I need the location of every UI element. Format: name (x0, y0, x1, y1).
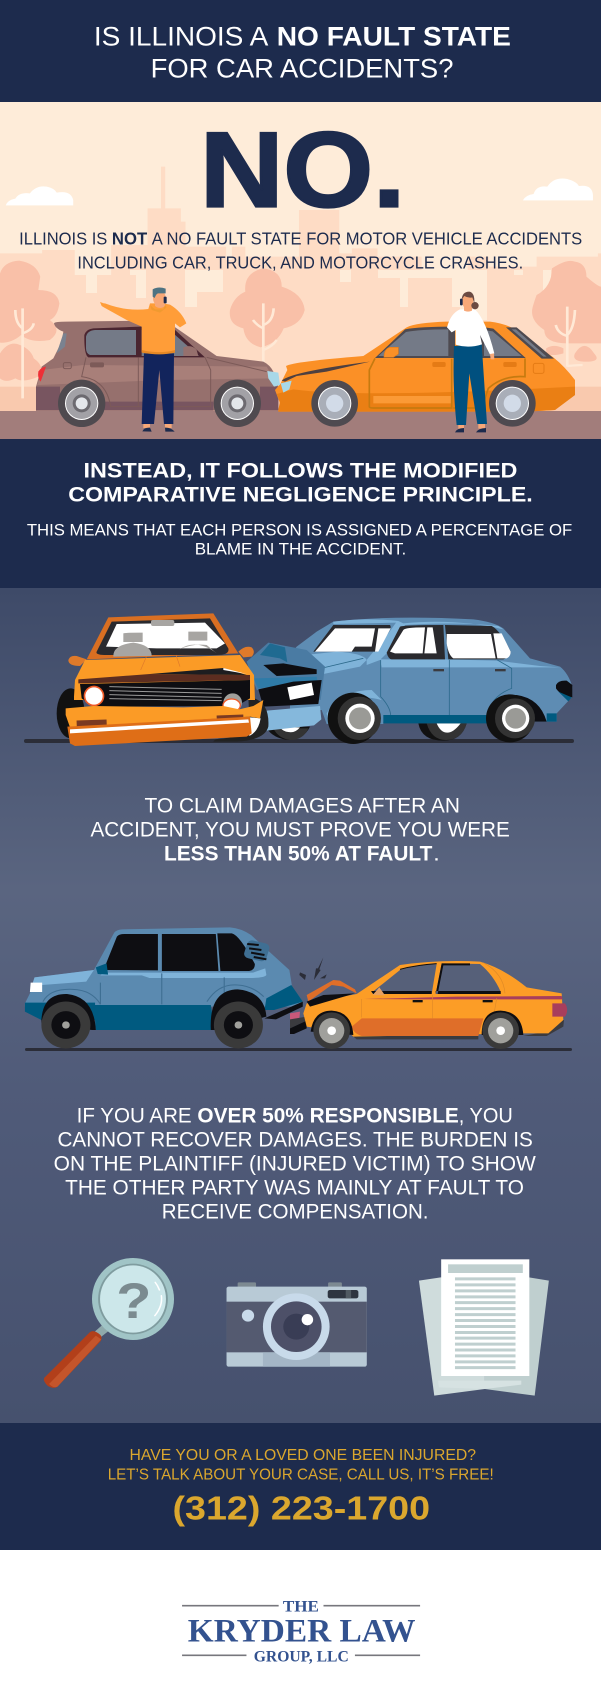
logo: The Kryder Law Group, LLC: GROUP, LLC (254, 1647, 349, 1665)
text block: burden of proof: RECEIVE COMPENSATION. (162, 1200, 429, 1223)
illustration: rear-end crash (25, 927, 572, 1051)
call to action text: LET’S TALK ABOUT YOUR CASE, CALL US, IT’S FREE! (108, 1464, 494, 1483)
person: woman on phone (447, 292, 494, 432)
wheel (41, 1002, 90, 1048)
wheel (486, 694, 535, 742)
city skyline background (0, 167, 601, 413)
person: man on phone (100, 287, 186, 432)
wheel (311, 380, 358, 427)
road (0, 411, 601, 439)
text block: less than 50% at fault: ACCIDENT, YOU MUST PROVE YOU WERE (90, 818, 510, 841)
text block: burden of proof (54, 1104, 536, 1223)
heading: title: NO FAULT STATE (277, 22, 511, 52)
text block: less than 50% at fault (90, 794, 510, 865)
orange sedan (290, 961, 567, 1049)
text block: burden of proof: IF YOU ARE (77, 1104, 192, 1127)
text block: burden of proof: , YOU (459, 1104, 513, 1127)
orange car front (57, 613, 268, 746)
text block: burden of proof: ON THE PLAINTIFF (INJURED VICTIM) TO SHOW (54, 1152, 536, 1175)
logo: The Kryder Law Group, LLC: THE (283, 1597, 319, 1615)
crash glass (267, 371, 292, 393)
hero statement text (19, 229, 582, 272)
panel: gradient section background (0, 588, 601, 1424)
hero statement text: NOT (112, 229, 148, 248)
explanation text (27, 520, 572, 558)
logo: The Kryder Law Group, LLC: KRYDER LAW (188, 1613, 415, 1649)
heading: title: IS ILLINOIS A (94, 22, 269, 52)
wheel (214, 1002, 263, 1048)
big answer NO.: NO. (200, 111, 405, 230)
wheel (489, 380, 536, 427)
icon: documents (419, 1259, 549, 1396)
heading: modified comparative negligence: COMPARATIVE NEGLIGENCE PRINCIPLE. (68, 482, 533, 506)
panel: call to action (0, 1423, 601, 1550)
panel: hero answer scene (0, 102, 601, 439)
panel: title header (0, 0, 601, 102)
text block: less than 50% at fault: LESS THAN 50% AT FAULT (164, 842, 433, 865)
phone number: (312) 223-1700 (172, 1489, 430, 1527)
icon: magnifying glass (44, 1258, 174, 1388)
logo: The Kryder Law Group, LLC (182, 1597, 420, 1665)
heading: title: FOR CAR ACCIDENTS? (151, 54, 453, 84)
orange car (267, 322, 575, 427)
call to action text (108, 1445, 494, 1483)
text block: burden of proof: OVER 50% RESPONSIBLE (197, 1104, 459, 1127)
clouds (6, 179, 593, 205)
illustration: head-on crash (24, 613, 574, 746)
crumpled hood and bumper (247, 643, 325, 740)
heading: title (94, 22, 511, 84)
brown car (36, 321, 278, 427)
heading: modified comparative negligence (68, 458, 533, 506)
wheel (313, 1012, 350, 1049)
trees (0, 261, 601, 398)
call to action text: HAVE YOU OR A LOVED ONE BEEN INJURED? (130, 1445, 476, 1464)
blue SUV (25, 927, 303, 1048)
explanation text: BLAME IN THE ACCIDENT. (195, 539, 406, 558)
blue car (290, 618, 572, 744)
impact sparks (299, 957, 327, 980)
panel: comparative negligence explanation (0, 439, 601, 588)
text block: burden of proof: THE OTHER PARTY WAS MAINLY AT FAULT TO (65, 1176, 524, 1199)
icon: camera (227, 1282, 367, 1367)
text block: burden of proof: CANNOT RECOVER DAMAGES. THE BURDEN IS (57, 1128, 533, 1151)
heading: modified comparative negligence: INSTEAD, IT FOLLOWS THE MODIFIED (84, 458, 517, 482)
text block: less than 50% at fault: TO CLAIM DAMAGES AFTER AN (145, 794, 460, 817)
text block: less than 50% at fault: . (433, 842, 440, 865)
wheel (328, 693, 381, 744)
icon: magnifying glass: ? (116, 1273, 151, 1329)
hero statement text: ILLINOIS IS (19, 229, 107, 248)
wheel (58, 380, 105, 427)
wheel (482, 1012, 519, 1049)
wheel (214, 380, 261, 427)
